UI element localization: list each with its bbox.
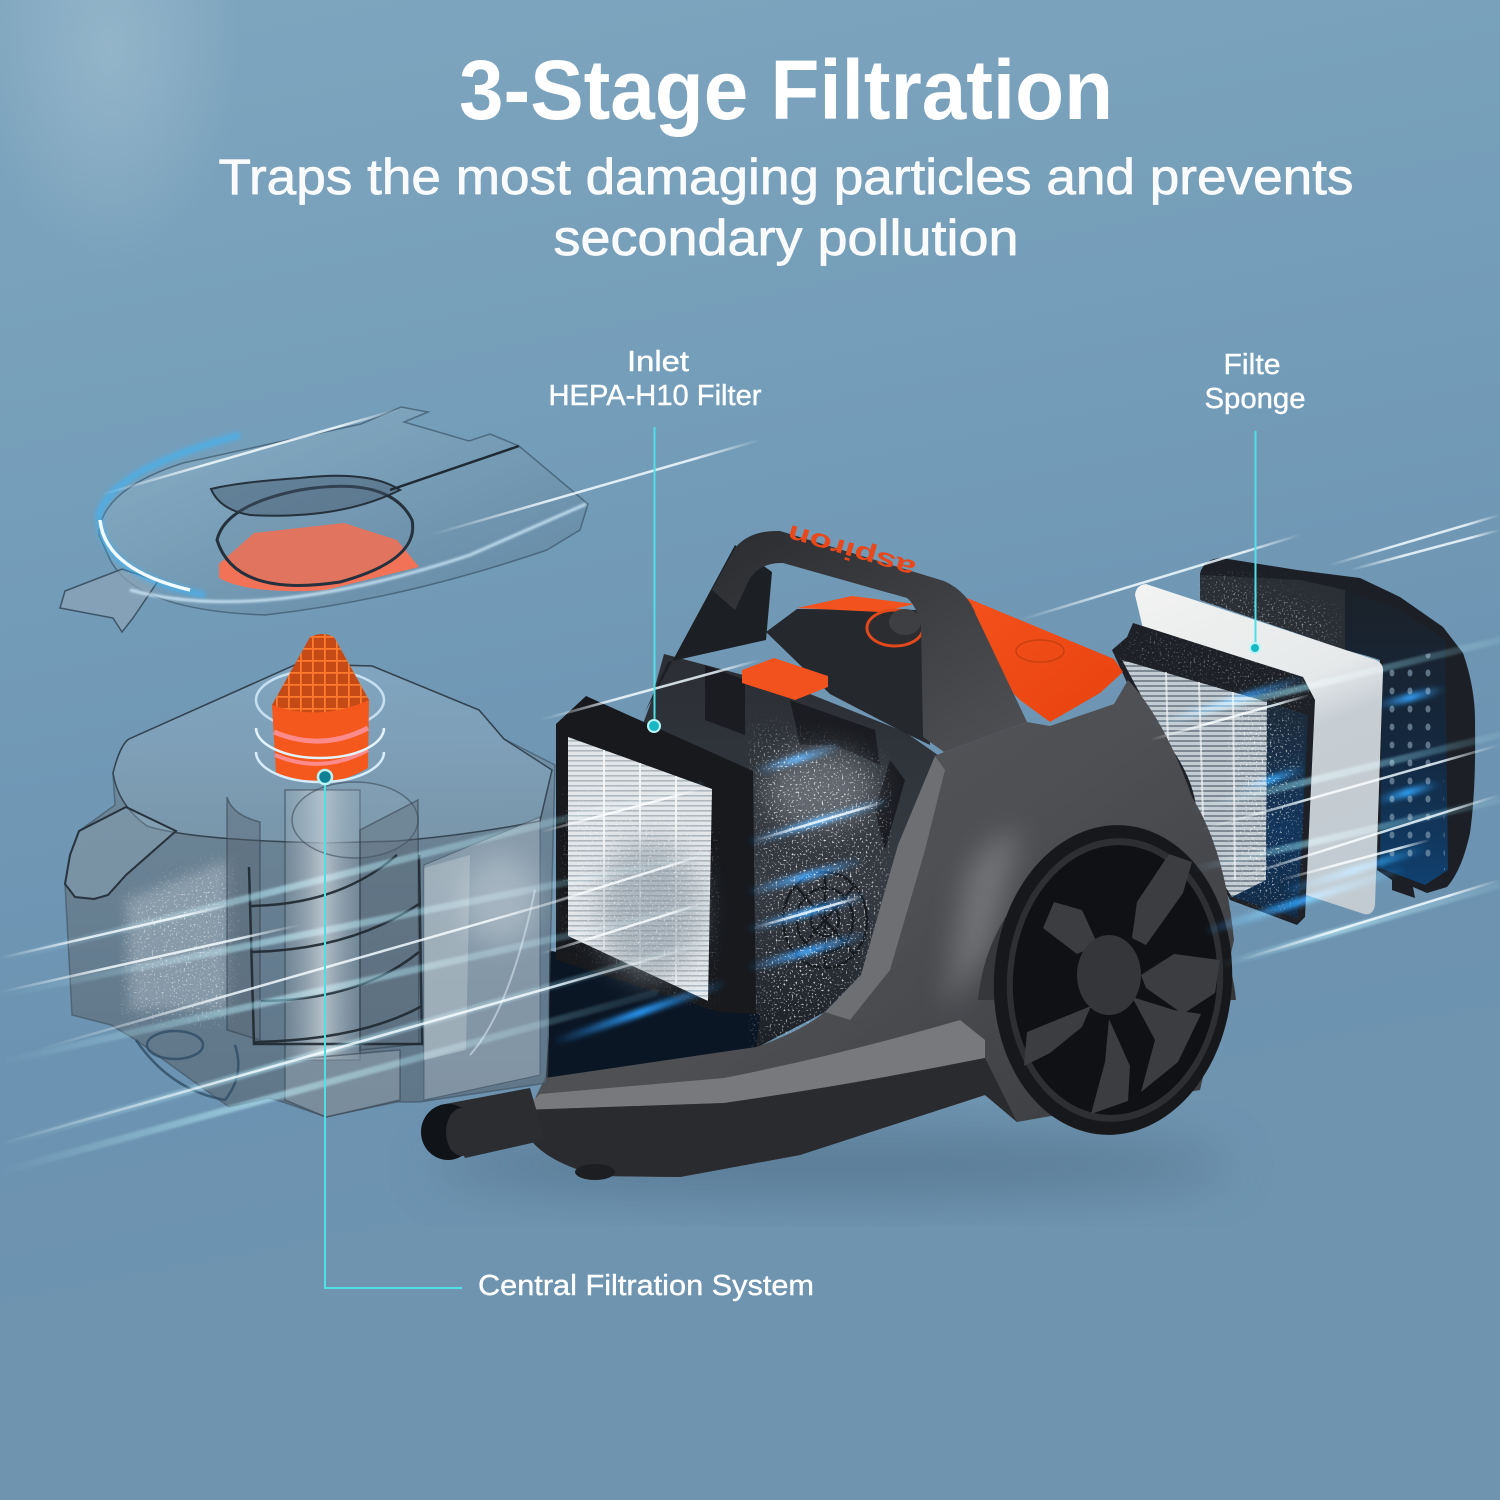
lid ridge (390, 446, 519, 490)
brand label: aspiron (784, 519, 919, 583)
blue glow streaks (560, 680, 1440, 1040)
cyclone ribs (249, 855, 422, 1044)
lid window (211, 476, 400, 516)
wheel spokes (1024, 854, 1220, 1114)
floor shadow (430, 1137, 1230, 1193)
bin lid (60, 407, 588, 632)
callout: central filtration system (318, 770, 814, 1302)
rear HEPA filter (1112, 623, 1315, 925)
subtitle: Traps the most damaging particles and prevents (218, 149, 1354, 205)
caster (575, 1164, 615, 1180)
callout: filter sponge (1204, 349, 1306, 653)
top cover (766, 609, 930, 745)
label (548, 346, 762, 412)
glowing lid rim (99, 435, 240, 595)
vacuum body (421, 519, 1243, 1180)
shell left strip (825, 756, 945, 1020)
central cylinder (227, 782, 419, 1117)
orange cone filter (256, 634, 384, 783)
orange top panel (960, 595, 1123, 722)
rear filter stack (1112, 558, 1475, 925)
interior floor (549, 950, 760, 1085)
interior fan grille (783, 872, 867, 968)
label: Central Filtration System (478, 1270, 814, 1302)
handle left hood (645, 545, 772, 712)
exhaust hose stub (421, 1088, 545, 1160)
title: 3-Stage Filtration (459, 43, 1113, 137)
rear mesh filter cover (1200, 558, 1475, 898)
bin dust fill (126, 860, 235, 1020)
callout: inlet HEPA-H10 filter (548, 346, 762, 732)
interior partitions (705, 665, 905, 850)
orange latch (742, 658, 828, 700)
base highlight (522, 1020, 985, 1110)
label (1204, 349, 1306, 415)
label: Inlet (627, 346, 689, 378)
cyan soft streaks (0, 640, 1500, 1172)
label: Sponge (1204, 383, 1306, 415)
subtitle: secondary pollution (554, 210, 1018, 266)
label: Filte (1224, 349, 1280, 381)
front HEPA filter (556, 696, 756, 1014)
subtitle (218, 149, 1354, 266)
shell highlight (945, 830, 1020, 1010)
main shell (522, 680, 1234, 1177)
bin right compartment (424, 817, 540, 1100)
label: HEPA-H10 Filter (548, 380, 762, 412)
white light streaks (0, 409, 1500, 1144)
lid tab (60, 569, 158, 632)
handle (712, 531, 1027, 752)
lid oval (217, 486, 413, 585)
orange rear cover (797, 596, 915, 612)
interior dust cloud (755, 730, 885, 1050)
bin shell (65, 664, 555, 1117)
base lower band (522, 1058, 1017, 1177)
lid shell (99, 407, 588, 615)
bin handle (65, 807, 176, 899)
bottom fittings (136, 1031, 238, 1100)
airflow streaks (0, 409, 1500, 1172)
dust bin (65, 664, 555, 1117)
bin lid rim (113, 664, 552, 843)
wheel arch (978, 855, 1236, 1000)
dial (867, 609, 923, 646)
wheel (983, 817, 1243, 1143)
white filter sponge (1135, 584, 1383, 914)
orange seal (219, 523, 419, 591)
dark interior (545, 654, 945, 1085)
